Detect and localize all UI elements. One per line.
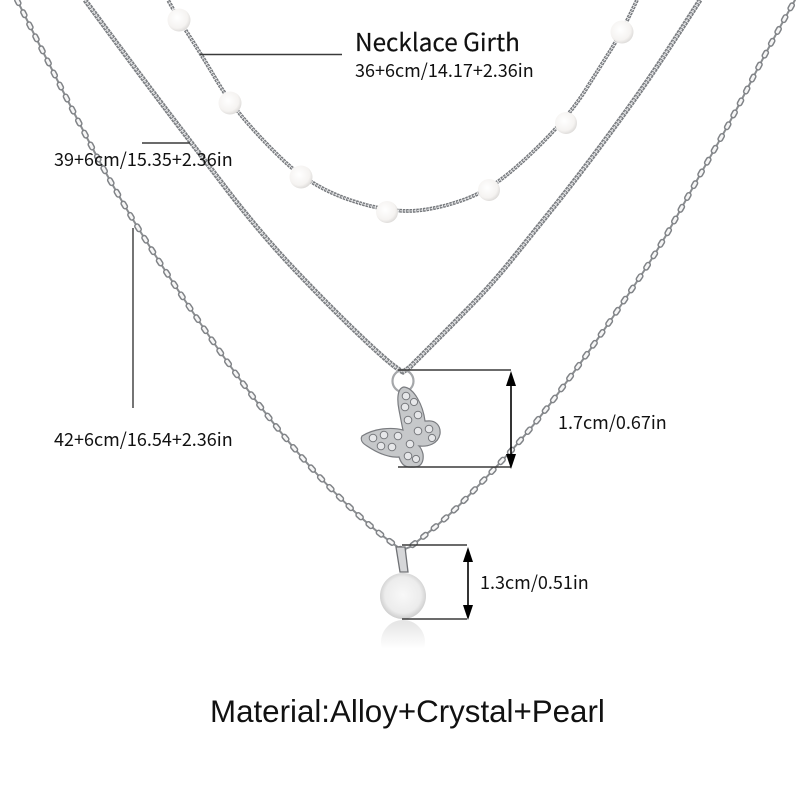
material caption: Material:Alloy+Crystal+Pearl xyxy=(210,694,605,729)
arrow: butterfly height xyxy=(506,371,516,469)
heading: necklace girth: Necklace Girth xyxy=(355,23,520,58)
label: butterfly size: 1.7cm/0.67in xyxy=(558,409,667,435)
arrow: pearl height xyxy=(463,547,473,620)
pearl pendant xyxy=(380,547,426,664)
label: short chain length: 36+6cm/14.17+2.36in xyxy=(355,57,534,83)
measure lines xyxy=(133,54,511,619)
small pearls on short chain xyxy=(168,8,634,223)
label: pearl size: 1.3cm/0.51in xyxy=(480,569,589,595)
label: long chain length: 42+6cm/16.54+2.36in xyxy=(54,426,233,452)
chain: middle curb chain with butterfly pendant xyxy=(85,0,700,372)
butterfly pendant xyxy=(361,370,440,467)
chain: long cable chain with pearl pendant xyxy=(17,0,795,550)
chain: short curb chain with pearl stations xyxy=(168,0,637,211)
label: middle chain length: 39+6cm/15.35+2.36in xyxy=(54,146,233,172)
